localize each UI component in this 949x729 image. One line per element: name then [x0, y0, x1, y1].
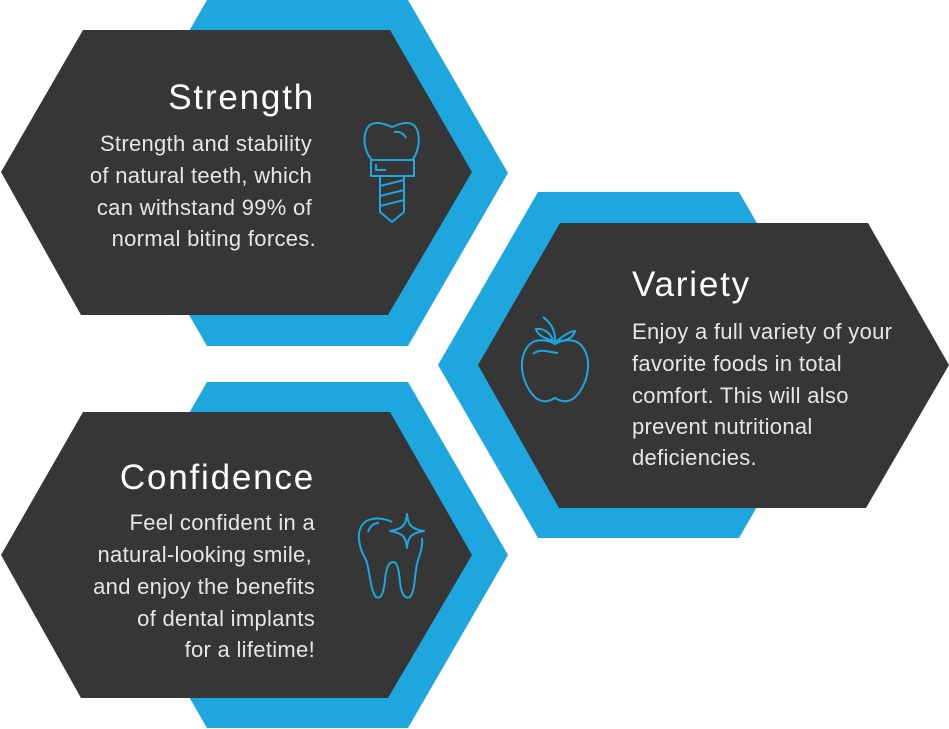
text: strength body: can withstand 99% of — [97, 195, 313, 220]
panel: confidence — [1, 382, 508, 728]
heading: variety: Variety — [632, 265, 751, 304]
text: confidence body: Feel confident in a — [130, 510, 315, 535]
text: confidence body: for a lifetime! — [185, 637, 315, 662]
text: variety body: comfort. This will also — [632, 383, 849, 408]
text: confidence body: and enjoy the benefits — [93, 574, 315, 599]
text: strength body: Strength and stability — [100, 131, 312, 156]
text: variety body: favorite foods in total — [632, 351, 842, 376]
text: variety body: Enjoy a full variety of your — [632, 319, 892, 344]
text: strength body: of natural teeth, which — [90, 163, 312, 188]
icon: sparkling tooth — [359, 514, 424, 598]
text: variety body: prevent nutritional — [632, 414, 813, 439]
heading: strength: Strength — [168, 78, 315, 117]
text: confidence body: natural-looking smile, — [98, 542, 312, 567]
text: confidence body: of dental implants — [137, 606, 315, 631]
panel: variety — [438, 192, 949, 538]
text: strength body: normal biting forces. — [112, 226, 316, 251]
heading: confidence: Confidence — [120, 458, 315, 497]
text: variety body: deficiencies. — [632, 445, 757, 470]
icon: apple — [522, 317, 588, 401]
icon: dental implant — [364, 123, 419, 222]
panel: strength — [1, 0, 508, 346]
